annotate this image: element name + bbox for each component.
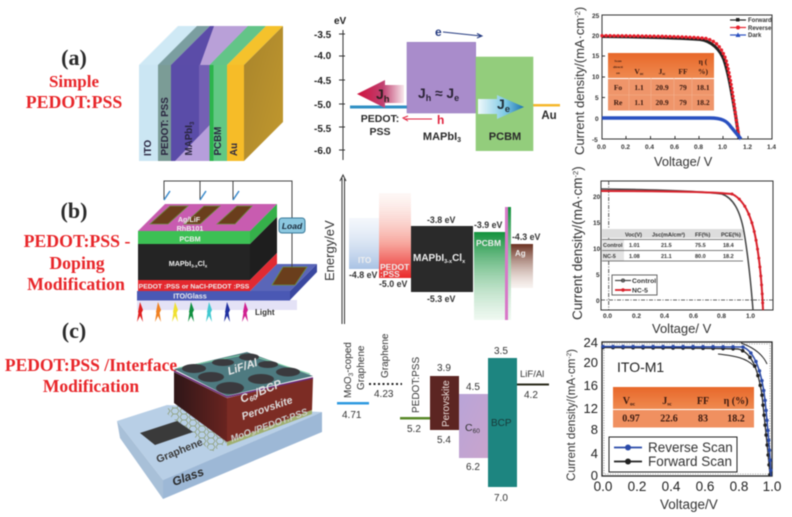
table: %): [698, 67, 708, 76]
energy diagram c: Graphene: [356, 345, 367, 390]
chart c: 0.6: [696, 479, 714, 494]
layer labels: Ag/LiF: [178, 215, 201, 224]
labels: 3: [457, 137, 461, 144]
curve: NC-5: [601, 191, 763, 310]
curve: forward: [603, 348, 770, 476]
chart b: 10: [593, 246, 601, 253]
layer labels: /PEDOT:PSS: [251, 406, 310, 437]
table: 20.9: [655, 83, 669, 92]
table: on: [616, 71, 620, 75]
curve: reverse: [602, 36, 739, 137]
chart c: 12: [584, 401, 598, 416]
chart c: 1.0: [763, 479, 781, 494]
bar: BCP: BCP: [491, 418, 512, 429]
axis: -4.0: [314, 51, 332, 62]
layer labels: x: [205, 264, 208, 268]
text: Jh≈Je: J: [418, 86, 426, 101]
table: Re: [614, 98, 623, 107]
arrow: e: e: [435, 25, 442, 39]
energy diagram b: PEDOT: [380, 262, 410, 272]
table: PCE(%): [721, 232, 741, 238]
table: FF: [697, 396, 709, 407]
axis title: ): [572, 7, 587, 11]
chart c: 0: [591, 468, 598, 483]
table: 79: [679, 83, 687, 92]
energy diagram c: 6.2: [466, 462, 480, 473]
energy diagram c: MoO: [343, 376, 354, 398]
energy diagram a: [314, 16, 560, 160]
device diagram: simple stack: [139, 26, 283, 161]
labels: layers: PCBM: [213, 127, 224, 156]
energy diagram b: -3.9 eV: [474, 220, 502, 230]
heading: (c): (c): [62, 318, 86, 343]
labels: MAPbI: [423, 131, 457, 143]
energy diagram c: 5.2: [407, 424, 421, 435]
chart c: 8: [591, 422, 598, 437]
table: η (%): [724, 396, 748, 407]
heading: PEDOT:PSS - Doping Modification: Doping: [49, 253, 105, 273]
table: Voc(V): [625, 232, 642, 238]
table: 1.01: [629, 243, 640, 249]
curve: dark: [602, 118, 741, 139]
chart a: -5: [592, 137, 598, 144]
layer labels: C: [239, 392, 251, 406]
energy diagram c: [337, 333, 549, 504]
legend: Forward Scan: [648, 454, 732, 469]
chart b: 20: [593, 194, 601, 201]
layer labels: [139, 215, 250, 300]
arrow: Je: e: [505, 104, 510, 115]
box: PCBM: [476, 57, 533, 151]
labels: PSS: [369, 126, 391, 138]
legend: [612, 275, 657, 295]
chart a: 0.0: [597, 144, 606, 151]
chart b: ): [570, 166, 585, 171]
chart c: 4: [591, 446, 598, 461]
load box: Load: [282, 221, 303, 231]
chart b: 0.4: [660, 313, 669, 320]
heading: Simple PEDOT:PSS: [26, 72, 122, 112]
legend: [730, 18, 772, 39]
table: oc: [640, 71, 644, 76]
layer labels: Perovskite: [240, 394, 294, 423]
table: sc: [662, 71, 666, 76]
energy diagram b: [322, 175, 540, 324]
chart b: 15: [593, 220, 601, 227]
energy diagram b: 3-x: [444, 259, 453, 265]
table: Jsc(mA/cm²): [652, 232, 685, 238]
energy diagram b: ITO: [358, 256, 371, 265]
axis: -5.5: [314, 124, 332, 135]
curve: reverse: [603, 346, 771, 476]
electrodes: [150, 206, 307, 285]
table: 80.0: [695, 254, 706, 260]
axis: -4.5: [314, 76, 332, 87]
table: FF: [678, 67, 688, 76]
layer labels: 60: [249, 394, 259, 404]
table: 1.1: [634, 98, 644, 107]
axis: Energy/eV: Energy/eV: [322, 220, 337, 281]
chart a: 1.4: [767, 144, 776, 151]
arrow: Jh: J: [376, 86, 384, 102]
chart c: -2: [566, 352, 573, 359]
chart a: 0.2: [621, 144, 630, 151]
legend: Reverse: [748, 26, 772, 32]
axis title: -2: [573, 11, 582, 18]
layer labels: 3: [251, 431, 257, 438]
chart b: 0.8: [717, 313, 726, 320]
labels: layers: MAPbI: [184, 125, 195, 156]
table: V: [634, 67, 640, 76]
axis: -3.5: [314, 30, 332, 41]
axis: eV: [334, 16, 347, 27]
chart a: 0.4: [645, 144, 654, 151]
table: Fo: [614, 83, 622, 92]
axis title: Current density/(mA·cm: [572, 18, 587, 155]
layer labels: [155, 357, 310, 489]
chart c: 20: [584, 355, 598, 370]
table: 22.6: [660, 414, 678, 424]
heading: PEDOT:PSS - Doping Modification: PEDOT:PSS -: [24, 231, 131, 251]
table: oc: [630, 402, 636, 408]
energy diagram b: :PSS: [380, 269, 400, 279]
energy diagram c: 5.4: [437, 435, 451, 446]
box: MAPbI3: [407, 42, 476, 113]
energy diagram b: Cl: [452, 253, 462, 264]
table: 21.1: [661, 254, 672, 260]
bar: C60: [459, 394, 488, 458]
table: [602, 229, 743, 261]
energy diagram c: PEDOT:PSS: [411, 357, 422, 413]
label: Light: Light: [255, 308, 275, 317]
chart b: 5: [596, 272, 600, 279]
arrow: Je: J: [497, 96, 505, 112]
energy diagram b: MAPbI: [413, 253, 444, 264]
table: [608, 53, 714, 110]
layer labels: Glass: [170, 464, 206, 489]
table: Control: [603, 243, 623, 249]
chart c: ): [565, 349, 578, 353]
table: NC-5: [603, 254, 616, 260]
energy diagram c: 3.9: [437, 363, 451, 374]
layer labels: RhB101: [177, 224, 203, 233]
table: 18.1: [696, 83, 710, 92]
table: 18.2: [723, 254, 734, 260]
load box: [279, 218, 305, 233]
table: [613, 387, 754, 428]
heading: PEDOT:PSS - Doping Modification: Modification: [27, 274, 125, 294]
glow: light: [137, 300, 297, 310]
legend: NC-5: [632, 288, 648, 294]
text: Jh≈Je: h: [426, 93, 431, 103]
chart a: 25: [592, 13, 600, 20]
chart a: 10: [592, 74, 600, 81]
axis: -6.0: [314, 146, 332, 157]
chart b: [570, 166, 773, 336]
table: Scan: [614, 59, 622, 63]
chart c: 24: [584, 335, 598, 350]
chart c: 0.4: [662, 479, 681, 494]
layer labels: MoO: [229, 427, 253, 445]
arrow: h: h: [437, 113, 444, 127]
chart c: [565, 335, 781, 512]
table: FF(%): [695, 232, 710, 238]
heading: Simple PEDOT:PSS: PEDOT:PSS: [26, 92, 122, 112]
axis: Energy/eV: [322, 175, 346, 324]
energy diagram c: -coped: [343, 342, 354, 373]
labels: layers: 3: [190, 121, 196, 125]
layer labels: LiF/Al: [226, 357, 260, 378]
device diagram b: [137, 181, 317, 322]
text: Jh≈Je: e: [454, 93, 459, 103]
stack: [138, 204, 277, 231]
bar: C60: C: [465, 422, 473, 434]
chart b: 0: [596, 298, 600, 305]
heading: PEDOT:PSS - Doping Modification: [24, 231, 131, 294]
labels: layers: [143, 97, 240, 156]
arrow: Jh: h: [384, 94, 390, 105]
labels: layers: Au: [229, 143, 240, 156]
heading: (a): (a): [61, 45, 87, 70]
energy diagram c: 4.2: [524, 390, 538, 401]
chart b: Current density/(mA·cm: [570, 177, 585, 320]
energy diagram c: 7.0: [494, 493, 508, 504]
table: 75.5: [695, 243, 706, 249]
labels: Au: [541, 110, 557, 122]
stack: [174, 372, 227, 442]
legend: Dark: [748, 33, 762, 39]
chart b: -2: [571, 171, 580, 177]
chart a: 1.0: [718, 144, 727, 151]
substrate: [250, 264, 317, 291]
table: 18.2: [696, 98, 710, 107]
panel: row c label: [5, 318, 177, 396]
table: 21.5: [661, 243, 672, 249]
arrow: h: [403, 113, 444, 127]
axis: -5.0: [314, 100, 332, 111]
table: J: [658, 67, 662, 76]
legend: Control: [632, 278, 656, 285]
table: 18.2: [727, 414, 745, 424]
layer labels: PCBM: [179, 234, 201, 244]
energy diagram b: -4.8 eV: [349, 270, 377, 280]
heading: PEDOT:PSS /Interface Modification: Modification: [43, 376, 139, 396]
table: 1.1: [634, 83, 644, 92]
chart a: Voltage/ V: [654, 154, 713, 169]
energy diagram b: Ag: [515, 249, 526, 258]
chart c: Voltage/V: [660, 497, 718, 512]
energy diagram b: PCBM: [476, 238, 501, 248]
axis: [314, 16, 347, 160]
energy diagram c: 3.5: [494, 346, 508, 357]
chart b: 1.0: [746, 313, 755, 320]
legend: Forward: [748, 18, 772, 24]
chart a: 0.6: [670, 144, 679, 151]
chart b: Voltage/ V: [652, 321, 712, 336]
chart b: 0.2: [632, 313, 641, 320]
chart a: 1.2: [743, 144, 752, 151]
layer labels: Graphene: [155, 436, 205, 466]
heading: Simple PEDOT:PSS: Simple: [49, 72, 99, 91]
heading: PEDOT:PSS /Interface Modification: [5, 355, 177, 396]
chart a: 5: [595, 95, 599, 102]
legend: [609, 437, 737, 472]
legend: Reverse Scan: [648, 440, 733, 455]
table: J: [662, 396, 667, 407]
label: ITO-M1: ITO-M1: [617, 359, 664, 375]
bar: BCP: [488, 358, 517, 487]
arrow: Je: [478, 95, 524, 119]
arrow: Jh: [357, 80, 404, 108]
energy diagram c: 4.71: [342, 410, 362, 421]
graphene sheet: [163, 405, 228, 452]
panel: row b label: [24, 198, 131, 294]
chart c: 0.2: [628, 479, 646, 494]
chart c: 0.8: [730, 479, 748, 494]
heading: PEDOT:PSS /Interface Modification: PEDOT:PSS /Interface: [5, 355, 177, 375]
labels: [361, 110, 557, 144]
table: 0.97: [622, 414, 640, 424]
energy diagram b: -3.8 eV: [427, 215, 455, 225]
energy diagram c: LiF/Al: [520, 369, 544, 380]
chart b: 0.6: [689, 313, 698, 320]
table: directi: [613, 65, 623, 69]
energy diagram c: 4.23: [374, 389, 394, 400]
light arrows: [137, 302, 248, 322]
arrow: e: [435, 25, 482, 39]
chart c: Current density/(mA·cm: [565, 359, 578, 481]
electrodes: [182, 354, 300, 394]
curve: control: [601, 189, 753, 310]
energy diagram c: 4.5: [466, 382, 480, 393]
layer labels: Cl: [198, 259, 205, 268]
table: 83: [698, 414, 708, 424]
chart c: 0.0: [594, 479, 612, 494]
chart b: 0.0: [603, 313, 612, 320]
chart a: 20: [592, 33, 600, 40]
wires: [164, 181, 292, 267]
labels: layers: ITO: [143, 139, 154, 156]
curve: forward: [602, 36, 739, 139]
table: 20.9: [655, 98, 669, 107]
chart a: [572, 7, 776, 169]
labels: PEDOT:: [361, 113, 399, 125]
labels: layers: PEDOT: PSS: [160, 97, 171, 156]
text: Jh≈Je: ≈ J: [431, 86, 454, 101]
chart a: 15: [592, 53, 600, 60]
energy diagram b: -5.3 eV: [427, 294, 455, 304]
bar: Perovskite: [430, 376, 459, 430]
layer labels: MAPbI: [169, 259, 191, 268]
layer labels: /BCP: [253, 378, 284, 400]
table: η (: [699, 57, 708, 66]
chart a: 0: [595, 116, 599, 123]
bar: C60: 60: [473, 428, 480, 435]
bar: Perovskite: Perovskite: [441, 380, 452, 427]
energy diagram b: -5.0 eV: [379, 279, 407, 289]
dark contact: [140, 421, 193, 445]
labels: PCBM: [489, 131, 521, 143]
table: 79: [679, 98, 687, 107]
device diagram c: [117, 352, 322, 499]
arrows: [718, 343, 767, 366]
layer labels: ITO/Glass: [173, 292, 207, 300]
energy diagram c: 3: [348, 372, 355, 376]
table: V: [623, 396, 630, 407]
table: 18.4: [723, 243, 735, 249]
heading: (b): (b): [61, 198, 87, 223]
chart c: 16: [584, 378, 598, 393]
energy diagram c: Graphene: [380, 333, 391, 378]
table: sc: [667, 402, 672, 408]
chart a: 0.8: [694, 144, 703, 151]
table: 1.08: [629, 254, 640, 260]
energy diagram b: -4.3 eV: [512, 232, 540, 242]
layer labels: PEDOT :PSS or NaCl-PEDOT :PSS: [139, 284, 250, 290]
energy diagram b: x: [462, 259, 466, 265]
layer labels: 3-x: [191, 264, 198, 268]
panel: row a label: [26, 45, 122, 112]
